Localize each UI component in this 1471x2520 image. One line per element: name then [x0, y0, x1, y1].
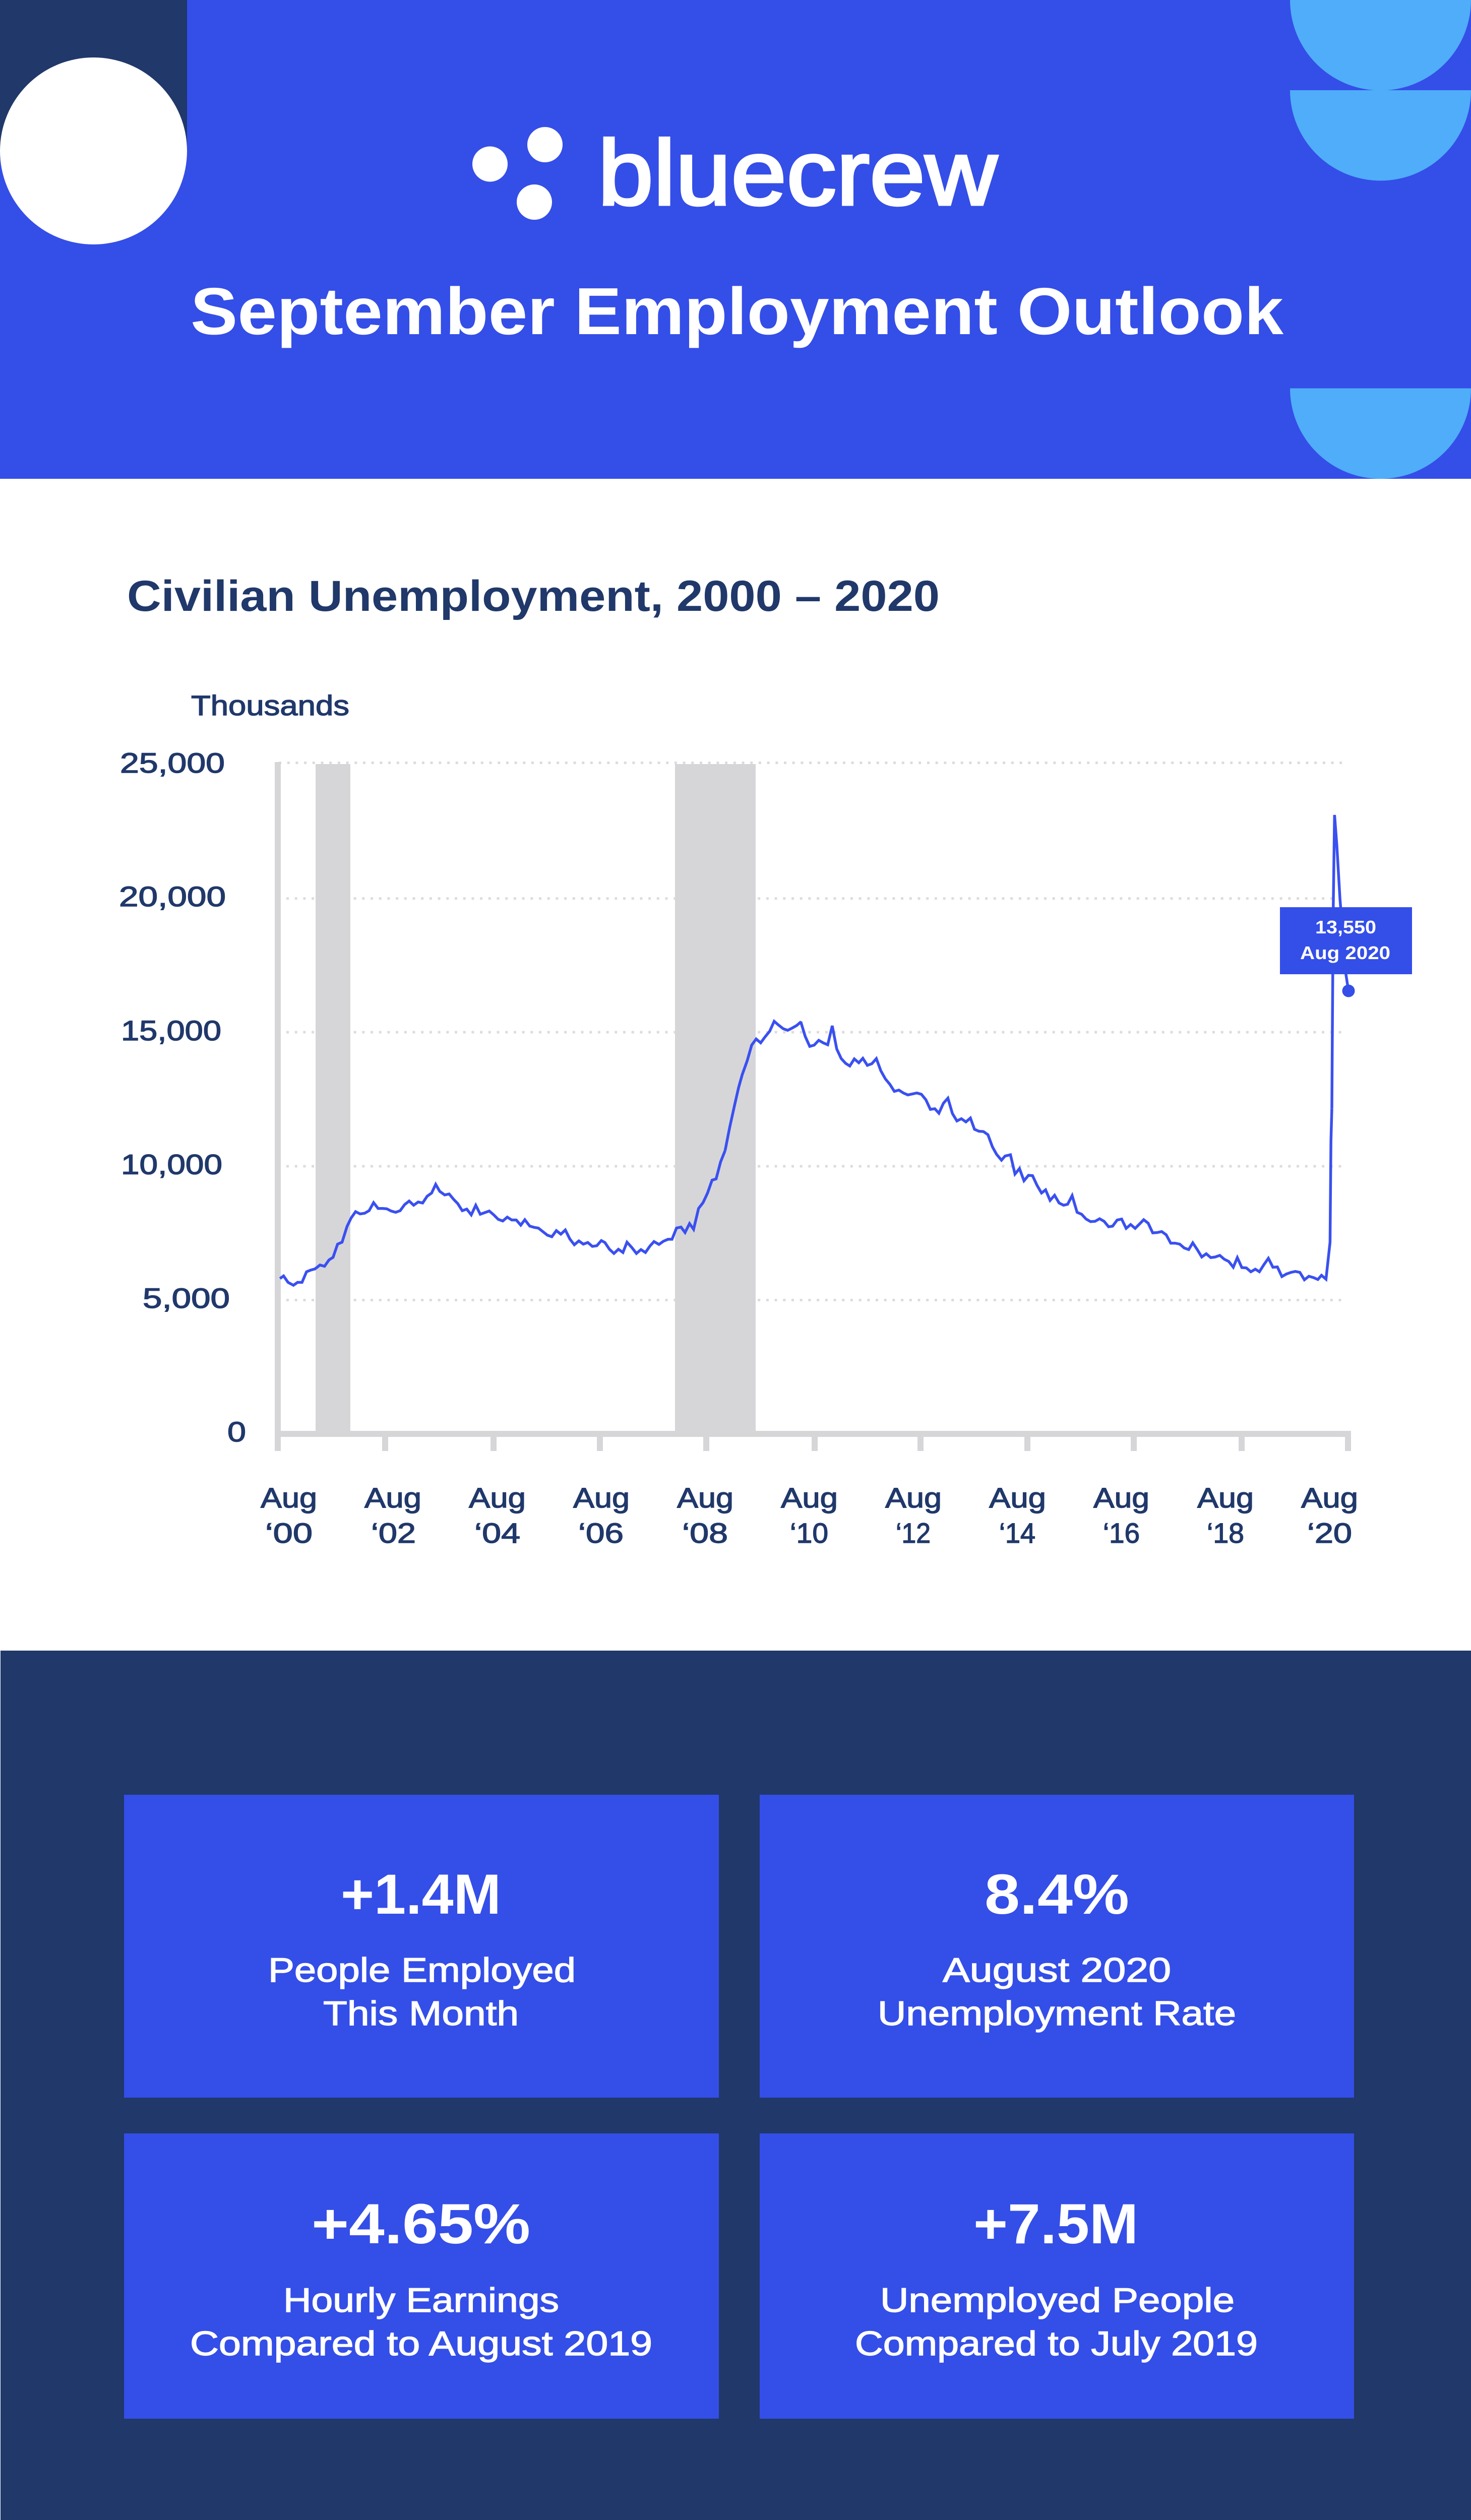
panel: unemployment chart	[119, 572, 1412, 1549]
x axis labels: ‘08	[682, 1517, 728, 1549]
x axis labels: Aug	[1301, 1482, 1358, 1514]
y axis labels: 0	[227, 1416, 246, 1447]
x axis labels: ‘16	[1103, 1517, 1140, 1549]
panel: statistics section	[1, 1651, 1471, 2520]
stat card: unemployed people: +7.5M	[973, 2192, 1138, 2255]
y axis labels: 5,000	[143, 1282, 230, 1314]
chart axes and ticks	[275, 762, 1351, 1451]
stat card: unemployment rate	[760, 1795, 1354, 2098]
y axis labels: 20,000	[119, 880, 226, 912]
stat card: people employed: People Employed	[268, 1951, 576, 1989]
x axis labels: Aug	[677, 1482, 733, 1514]
x axis labels: Aug	[885, 1482, 942, 1514]
x axis labels: Aug	[469, 1482, 526, 1514]
x axis labels: Aug	[364, 1482, 421, 1514]
y axis labels: 15,000	[121, 1015, 221, 1046]
x axis labels: ‘14	[999, 1517, 1035, 1549]
stat card: unemployed people: Unemployed People	[880, 2281, 1235, 2319]
x axis labels: Aug	[1093, 1482, 1149, 1514]
decoration: light blue half circle 2	[1290, 90, 1471, 180]
x axis labels: ‘06	[578, 1517, 624, 1549]
x axis labels: ‘18	[1207, 1517, 1244, 1549]
callout: latest value: Aug 2020	[1300, 942, 1390, 963]
y axis unit label: Thousands	[191, 689, 349, 721]
chart heading: Civilian Unemployment, 2000 – 2020	[127, 572, 940, 620]
stat card: unemployment rate: Unemployment Rate	[878, 1994, 1236, 2033]
decoration: light blue half circle 3	[1290, 388, 1471, 479]
stat card: unemployment rate: August 2020	[943, 1951, 1171, 1989]
x axis labels: ‘20	[1307, 1517, 1352, 1549]
stat card: hourly earnings: Compared to August 2019	[190, 2324, 652, 2363]
stat card: hourly earnings	[124, 2133, 719, 2419]
stat card: unemployed people	[760, 2133, 1354, 2419]
x axis labels: ‘00	[265, 1517, 313, 1549]
callout: latest value	[1280, 907, 1412, 974]
decoration: light blue half circle 1	[1290, 0, 1471, 91]
x axis labels: Aug	[261, 1482, 317, 1514]
logo: bluecrew	[472, 121, 998, 224]
x axis labels: ‘10	[790, 1517, 828, 1549]
x axis labels: ‘12	[896, 1517, 931, 1549]
stat card: people employed	[124, 1795, 719, 2098]
x axis labels: ‘02	[371, 1517, 416, 1549]
x axis labels: ‘04	[474, 1517, 520, 1549]
stat card: hourly earnings: Hourly Earnings	[283, 2281, 559, 2319]
stat card: people employed: This Month	[323, 1994, 519, 2033]
decoration: dark corner square	[0, 0, 187, 151]
y axis labels: 25,000	[120, 747, 225, 779]
decoration: white circle	[0, 57, 187, 244]
panel: header banner	[0, 0, 1471, 479]
stat card: people employed: +1.4M	[341, 1863, 501, 1926]
stat card: unemployment rate: 8.4%	[985, 1863, 1129, 1926]
x axis labels: Aug	[781, 1482, 838, 1514]
x axis labels: Aug	[573, 1482, 630, 1514]
x axis labels: Aug	[1197, 1482, 1254, 1514]
y axis labels	[119, 747, 246, 1447]
callout: latest value: 13,550	[1315, 917, 1376, 937]
stat card: hourly earnings: +4.65%	[312, 2192, 530, 2255]
title: September Employment Outlook	[191, 274, 1284, 348]
icon: logo dots	[472, 127, 563, 220]
y axis labels: 10,000	[121, 1148, 222, 1180]
x axis labels	[261, 1482, 1358, 1549]
marker: latest point	[1342, 985, 1355, 997]
logo wordmark: bluecrew	[598, 121, 998, 224]
stat card: unemployed people: Compared to July 2019	[855, 2324, 1258, 2363]
recession bands	[316, 764, 756, 1432]
line series: civilian unemployment	[280, 815, 1349, 1285]
x axis labels: Aug	[989, 1482, 1046, 1514]
